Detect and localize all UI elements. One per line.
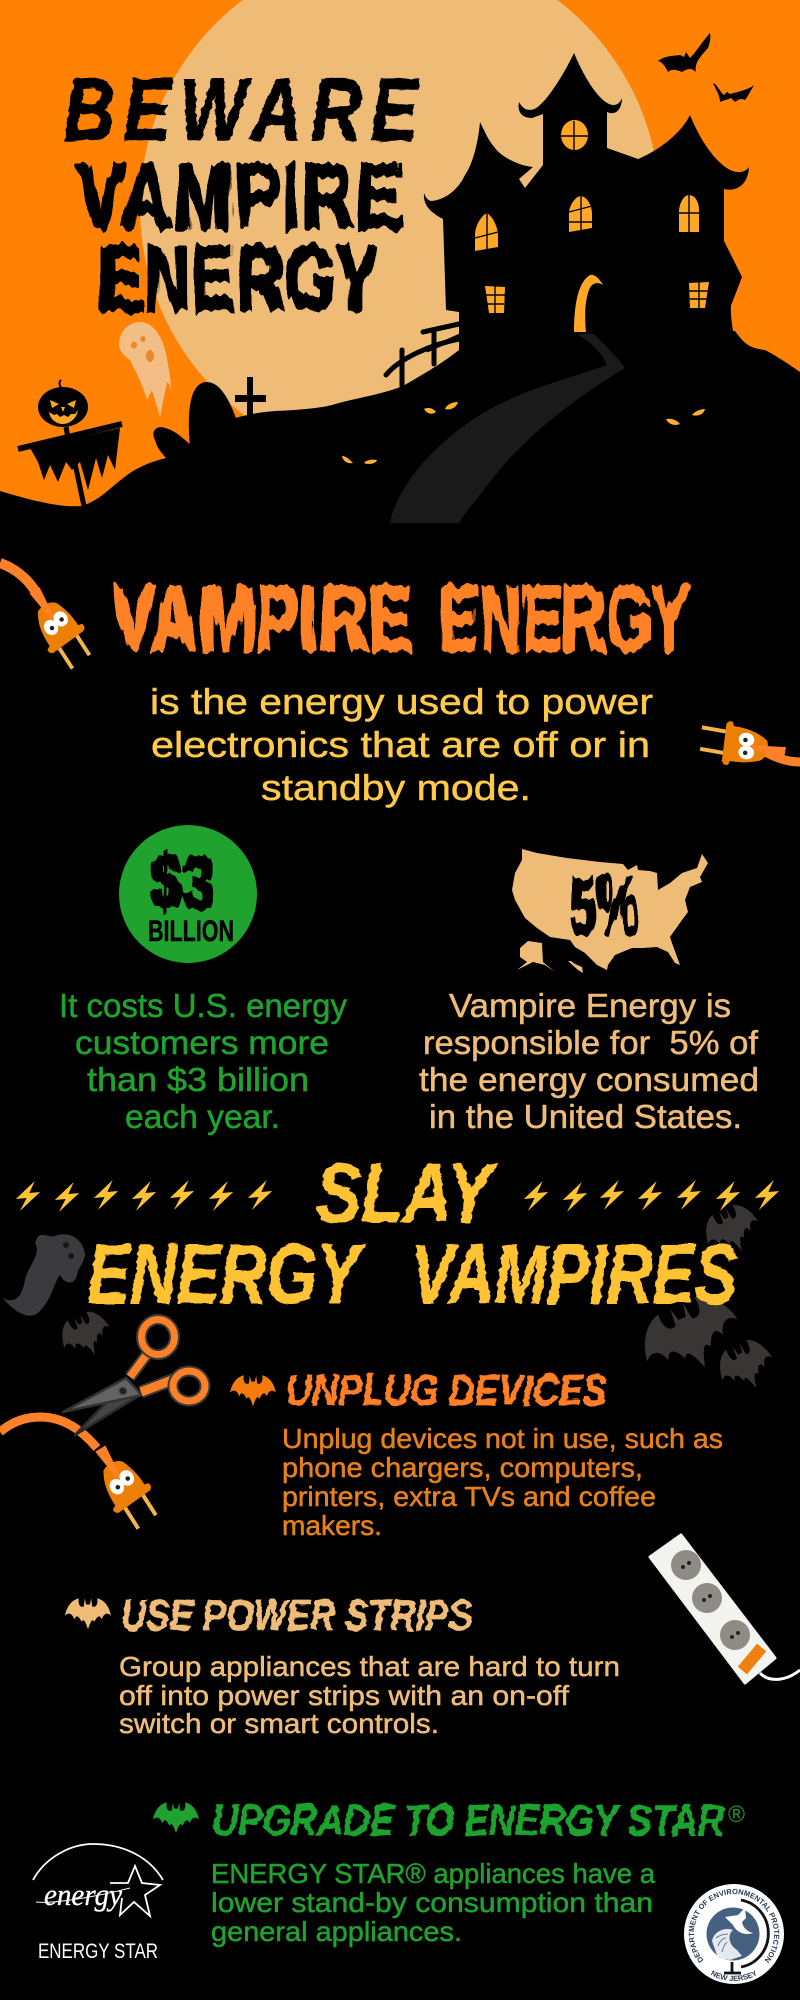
text: share: in the United States. [429, 1098, 742, 1135]
logo: energy star [33, 1844, 163, 1963]
flying bats [658, 33, 754, 102]
text: unplug devices: phone chargers, computers, [282, 1452, 643, 1483]
definition text: standby mode. [261, 767, 531, 808]
scarecrow with pumpkin head [18, 380, 122, 506]
ghost [119, 322, 171, 417]
logo: energy star: ENERGY STAR [38, 1940, 158, 1963]
dark bats [54, 1198, 781, 1400]
sky [0, 0, 800, 520]
plug: right [696, 716, 800, 775]
heading: use power strips: USE POWER STRIPS [121, 1591, 472, 1640]
dark ghost [3, 1234, 85, 1316]
text: cost: each year. [125, 1098, 280, 1135]
gravestones [153, 382, 238, 462]
text: share [419, 987, 759, 1135]
plug with cord [0, 1417, 167, 1535]
icon: power strip [650, 1535, 800, 1683]
icon: orange bat [230, 1375, 276, 1406]
text: unplug devices: printers, extra TVs and coffee [282, 1481, 656, 1512]
logo: NJDEP seal: DEPARTMENT OF ENVIRONMENTAL PROTECTION [688, 1888, 780, 1963]
house windows [475, 120, 709, 332]
heading: slay energy vampires [87, 1146, 737, 1321]
text: energy star: general appliances. [211, 1916, 462, 1947]
house silhouette [424, 53, 749, 360]
heading: unplug devices: UNPLUG DEVICES [286, 1366, 607, 1415]
text: power strips: off into power strips with an on-off [119, 1680, 569, 1711]
text: unplug devices: makers. [282, 1510, 382, 1541]
text: share: Vampire Energy is [449, 987, 731, 1024]
text: unplug devices: Unplug devices not in use, such as [282, 1423, 723, 1454]
text: cost: It costs U.S. energy [59, 987, 347, 1024]
stat map: 5 percent of US energy: 5% [569, 861, 640, 950]
stat badge: $3 billion: BILLION [148, 915, 234, 948]
lightning bolts: left [16, 1180, 272, 1212]
cross gravestone [235, 377, 266, 417]
hill silhouette [0, 331, 800, 600]
map of USA [512, 849, 708, 973]
moon [140, 0, 660, 467]
heading: slay energy vampires: SLAY [316, 1146, 498, 1240]
text: unplug devices [282, 1423, 723, 1541]
text: cost: customers more [75, 1024, 329, 1061]
definition text: electronics that are off or in [151, 724, 650, 765]
heading: vampire energy: VAMPIRE [111, 568, 412, 670]
text: share: the energy consumed [419, 1061, 759, 1098]
title [64, 60, 420, 330]
lightning bolts: right [524, 1180, 779, 1212]
heading: upgrade to energy star: ® [728, 1801, 745, 1827]
title: VAMPIRE [77, 146, 403, 248]
icon: scissors [63, 1320, 205, 1435]
text: cost [59, 987, 347, 1135]
definition text: is the energy used to power [150, 681, 653, 722]
text: energy star: lower stand-by consumption than [211, 1887, 653, 1918]
plug: top left [0, 563, 100, 675]
title: ENERGY [99, 228, 380, 330]
text: power strips [119, 1651, 620, 1739]
logo: energy star: energy [44, 1877, 122, 1912]
stat badge: $3 billion: $3 [150, 840, 214, 925]
road [390, 334, 625, 523]
panel: haunted house scene [0, 0, 800, 600]
text: share: responsible for 5% of [423, 1024, 759, 1061]
text: power strips: switch or smart controls. [119, 1708, 439, 1739]
stat map: 5 percent of US energy [512, 849, 708, 973]
definition text [150, 681, 653, 808]
text: energy star [211, 1858, 655, 1947]
title: BEWARE [64, 60, 420, 159]
icon: green bat [153, 1802, 199, 1833]
stat badge: $3 billion [119, 825, 257, 963]
heading: slay energy vampires: ENERGY [87, 1227, 365, 1321]
logo: NJDEP seal: NEW JERSEY [710, 1970, 756, 1981]
icon: tan bat [65, 1598, 111, 1629]
cat eyes [342, 402, 705, 464]
text: power strips: Group appliances that are hard to turn [119, 1651, 620, 1682]
text: energy star: ENERGY STAR® appliances have a [211, 1858, 655, 1889]
text: cost: than $3 billion [87, 1061, 309, 1098]
fence [386, 324, 459, 386]
